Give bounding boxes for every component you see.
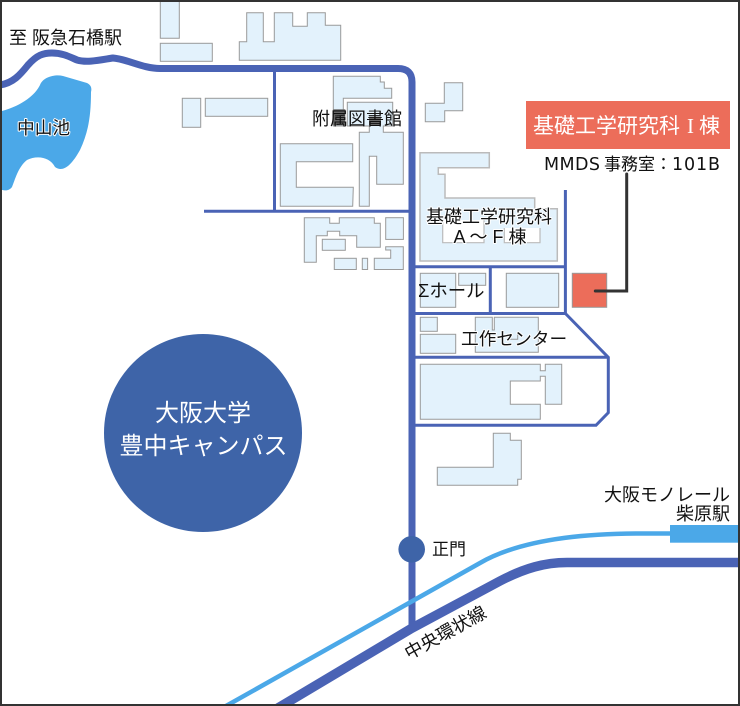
label box: Kiso-kogaku I building bbox=[526, 101, 730, 149]
label box: Kiso-kogaku I building: 棟 bbox=[699, 115, 720, 138]
railway: Osaka monorail bbox=[226, 534, 672, 706]
label: Sigma Hall: Σホール bbox=[418, 280, 485, 301]
campus circle: 豊中キャンパス bbox=[120, 433, 288, 460]
label: buildings A-F: A ～ F 棟 bbox=[453, 227, 527, 247]
building: Kiso-kogaku A-F bbox=[420, 153, 557, 261]
roads: campus inner roads bbox=[204, 68, 608, 425]
campus name: 大阪大学 bbox=[155, 400, 251, 427]
label: buildings A-F: 基礎工学研究科 bbox=[426, 207, 552, 227]
buildings: workshop center block bbox=[420, 317, 538, 353]
label: MMDS office: 101B bbox=[672, 155, 720, 175]
label: buildings A-F bbox=[426, 207, 552, 247]
label box: Kiso-kogaku I building: I bbox=[687, 114, 694, 138]
label: MMDS office: MMDS bbox=[544, 155, 600, 175]
marker: main gate bbox=[398, 536, 425, 563]
buildings: south block bbox=[420, 364, 562, 485]
label: Osaka monorail Shibahara station: 大阪モノレール bbox=[604, 485, 730, 505]
label: MMDS office bbox=[544, 155, 720, 175]
monorail station block bbox=[670, 525, 740, 543]
target building marker bbox=[572, 273, 607, 307]
leader line bbox=[595, 174, 627, 291]
label: Osaka monorail Shibahara station bbox=[604, 485, 730, 524]
buildings: Sigma Hall block bbox=[420, 273, 559, 307]
label box: Kiso-kogaku I building: 基礎工学研究科 bbox=[533, 115, 680, 138]
label: Osaka monorail Shibahara station: 柴原駅 bbox=[676, 504, 730, 524]
label: pond name: 中山池 bbox=[17, 118, 70, 138]
label: to Hankyu Ishibashi station: 至 阪急石橋駅 bbox=[9, 28, 122, 48]
buildings: south of library bbox=[304, 218, 403, 270]
label: main gate: 正門 bbox=[432, 540, 466, 559]
pond: Nakayama-ike bbox=[2, 75, 91, 190]
buildings: north-west block bbox=[160, 0, 341, 127]
buildings: library block bbox=[280, 76, 403, 206]
road: main road from Hankyu Ishibashi bbox=[0, 53, 412, 628]
label: workshop center: 工作センター bbox=[461, 329, 567, 349]
label: MMDS office: 事務室： bbox=[604, 155, 672, 174]
label: library: 附属図書館 bbox=[312, 109, 402, 129]
road: Chuo Kanjo line bbox=[278, 562, 740, 706]
campus circle bbox=[104, 334, 302, 532]
label: Chuo Kanjo line: 中央環状線 bbox=[401, 602, 490, 663]
building: small north bbox=[425, 83, 463, 122]
